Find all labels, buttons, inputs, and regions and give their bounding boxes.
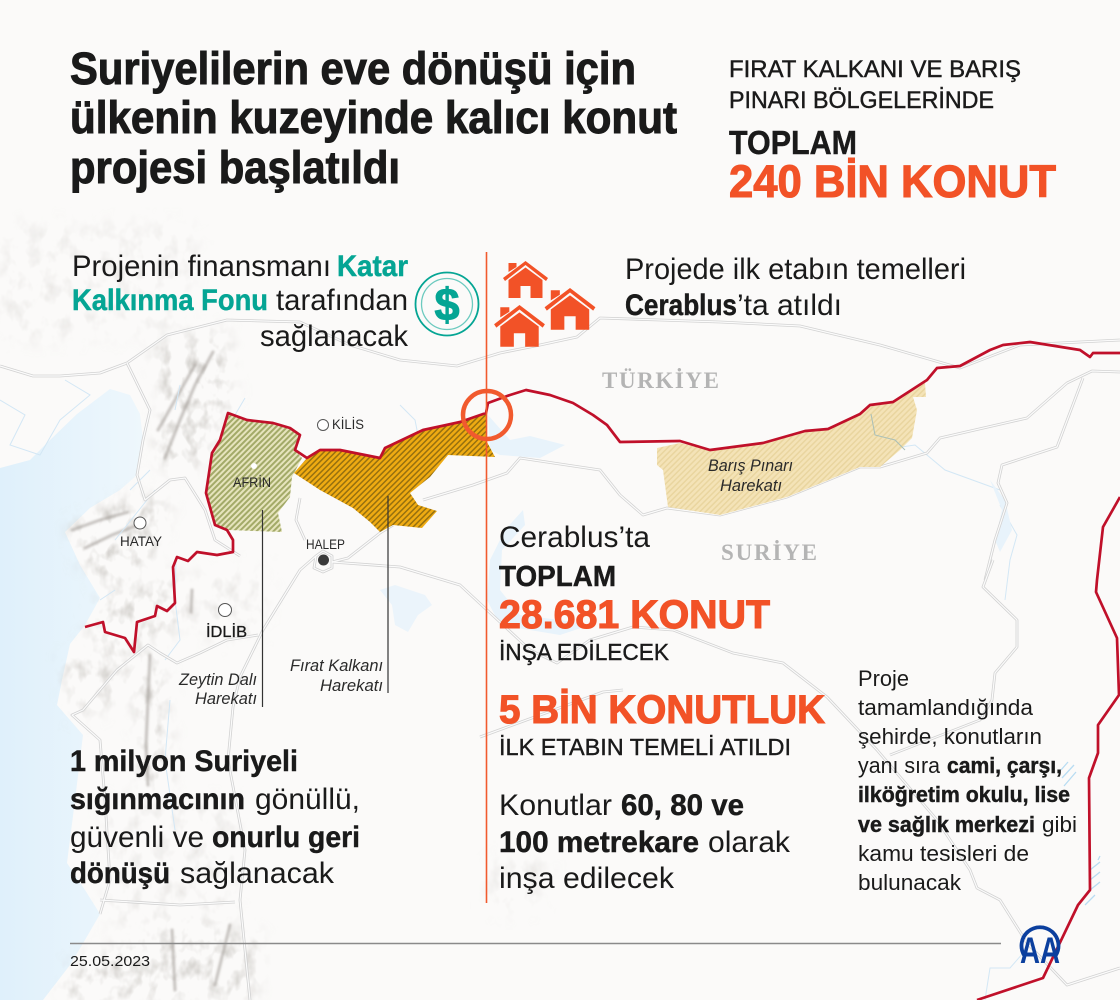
headline stat: 240 bin konut: TOPLAM bbox=[729, 124, 857, 161]
text: public facilities: cami, çarşı, bbox=[947, 753, 1062, 778]
stats: Cerablus housing: İNŞA EDİLECEK bbox=[499, 639, 670, 665]
text: public facilities: ve sağlık merkezi bbox=[858, 812, 1035, 837]
text: public facilities: şehirde, konutların bbox=[858, 724, 1042, 749]
text: foundation laid: Cerablus bbox=[625, 289, 737, 322]
stats: Cerablus housing: İLK ETABIN TEMELİ ATILDI bbox=[499, 734, 791, 760]
text: apartment sizes: 100 metrekare bbox=[499, 826, 699, 859]
city: Hatay bbox=[120, 517, 162, 549]
map label: Türkiye: TÜRKİYE bbox=[602, 368, 719, 393]
marker: Cerablus circle bbox=[463, 391, 511, 439]
label: Zeytin Dalı Harekatı with leader: Zeytin Dalı bbox=[178, 670, 257, 689]
stats: Cerablus housing bbox=[499, 521, 825, 760]
text: public facilities: ilköğretim okulu, lise bbox=[858, 782, 1070, 807]
divider: orange vertical line bbox=[486, 252, 488, 903]
label: Fırat Kalkanı Harekatı with leader bbox=[290, 496, 388, 695]
label: Barış Pınarı Harekatı: Barış Pınarı bbox=[708, 456, 793, 475]
city: Halep: HALEP bbox=[306, 537, 345, 552]
text: financing: tarafından bbox=[276, 284, 408, 317]
text: financing: Katar bbox=[337, 250, 408, 283]
city: Hatay: HATAY bbox=[120, 534, 162, 549]
text: financing bbox=[72, 250, 408, 353]
text: financing: Kalkınma Fonu bbox=[72, 284, 268, 317]
text: 1 million Syrians: gönüllü, bbox=[255, 783, 360, 816]
label: Barış Pınarı Harekatı bbox=[708, 456, 793, 495]
stats: Cerablus housing: 28.681 KONUT bbox=[499, 593, 770, 637]
text: 1 million Syrians: onurlu geri bbox=[212, 821, 360, 854]
label: Fırat Kalkanı Harekatı with leader: Harekatı bbox=[320, 676, 383, 695]
label: Zeytin Dalı Harekatı with leader bbox=[178, 510, 262, 708]
city: Afrin: AFRİN bbox=[233, 475, 271, 490]
city: İdlib: İDLİB bbox=[206, 622, 247, 641]
text: public facilities: gibi bbox=[1042, 812, 1077, 837]
text: foundation laid: Projede ilk etabın temelleri bbox=[625, 253, 966, 286]
city: Afrin bbox=[233, 463, 271, 490]
title: ülkenin kuzeyinde kalıcı konut bbox=[70, 92, 677, 143]
text: 1 million Syrians: güvenli ve bbox=[70, 821, 204, 854]
title bbox=[70, 43, 677, 193]
area: Barış Pınarı bbox=[657, 383, 926, 515]
city: İdlib bbox=[206, 604, 247, 641]
text: apartment sizes: olarak bbox=[708, 826, 790, 859]
text: public facilities: yanı sıra bbox=[858, 753, 940, 778]
label: Barış Pınarı Harekatı: Harekatı bbox=[720, 476, 782, 495]
city: Kilis: KİLİS bbox=[332, 417, 364, 432]
text: 1 million Syrians: sağlanacak bbox=[180, 857, 334, 890]
footer rule bbox=[70, 942, 1001, 944]
title: projesi başlatıldı bbox=[70, 142, 400, 193]
border: Turkey-Syria bbox=[85, 342, 1120, 1000]
text: apartment sizes: Konutlar bbox=[499, 789, 612, 822]
text: apartment sizes bbox=[499, 789, 790, 895]
city: Halep bbox=[306, 537, 345, 566]
area: Fırat Kalkanı bbox=[294, 413, 495, 532]
stats: Cerablus housing: TOPLAM bbox=[499, 561, 616, 593]
text: public facilities bbox=[858, 666, 1077, 895]
text: public facilities: bulunacak bbox=[858, 870, 962, 895]
map label: Suriye: SURİYE bbox=[721, 540, 817, 565]
label: Fırat Kalkanı Harekatı with leader: Fırat Kalkanı bbox=[290, 656, 383, 675]
icon: dollar coin bbox=[416, 272, 478, 336]
text: 1 million Syrians: dönüşü bbox=[70, 857, 170, 890]
text: financing: sağlanacak bbox=[260, 320, 408, 353]
headline stat: 240 bin konut bbox=[729, 56, 1056, 207]
logo: AA: AA bbox=[1020, 930, 1060, 971]
city: Kilis bbox=[318, 417, 364, 432]
stats: Cerablus housing: Cerablus’ta bbox=[499, 521, 651, 554]
title: Suriyelilerin eve dönüşü için bbox=[70, 43, 636, 94]
headline stat: 240 bin konut: 240 BİN KONUT bbox=[729, 156, 1056, 207]
text: 1 million Syrians bbox=[70, 745, 360, 890]
date: 25.05.2023 bbox=[70, 953, 150, 970]
icon: dollar coin: $ bbox=[434, 279, 460, 330]
stats: Cerablus housing: 5 BİN KONUTLUK bbox=[499, 688, 825, 732]
text: foundation laid bbox=[625, 253, 966, 322]
text: public facilities: Proje bbox=[858, 666, 909, 691]
headline stat: 240 bin konut: FIRAT KALKANI VE BARIŞ bbox=[729, 56, 1021, 83]
icon: houses bbox=[494, 261, 595, 347]
river inside Barış Pınarı bbox=[871, 414, 905, 450]
text: financing: Projenin finansmanı bbox=[72, 250, 331, 283]
text: 1 million Syrians: 1 milyon Suriyeli bbox=[70, 745, 298, 778]
text: public facilities: kamu tesisleri de bbox=[858, 841, 1029, 866]
text: apartment sizes: 60, 80 ve bbox=[621, 789, 744, 822]
text: apartment sizes: inşa edilecek bbox=[499, 862, 674, 895]
headline stat: 240 bin konut: PINARI BÖLGELERİNDE bbox=[729, 87, 994, 114]
text: public facilities: tamamlandığında bbox=[858, 695, 1033, 720]
text: 1 million Syrians: sığınmacının bbox=[70, 783, 245, 816]
label: Zeytin Dalı Harekatı with leader: Harekatı bbox=[195, 689, 257, 708]
area: Zeytin Dalı (Afrin) bbox=[206, 413, 302, 532]
text: foundation laid: ’ta atıldı bbox=[737, 289, 842, 322]
